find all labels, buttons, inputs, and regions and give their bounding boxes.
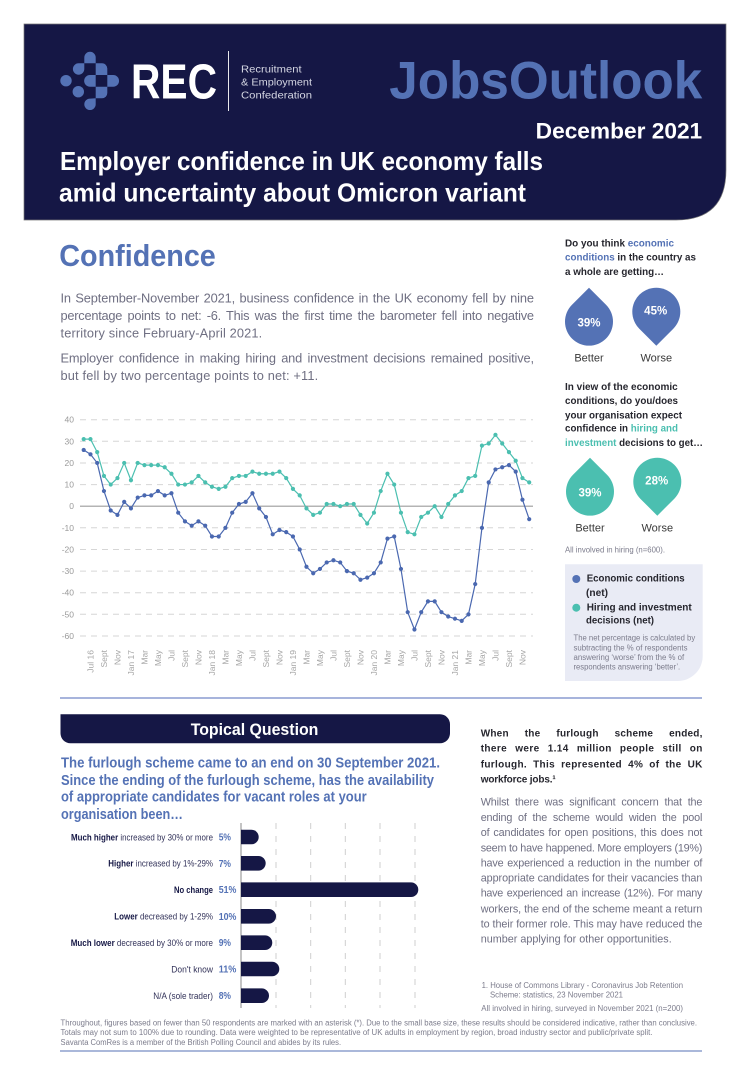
bar: much higher 5% bbox=[71, 830, 259, 844]
furlough body text: seem to have happened. More employers (19%) bbox=[481, 842, 702, 854]
legend note: respondents answering ‘better’. bbox=[574, 662, 680, 672]
furlough body text: have experienced an increase (12%). For many bbox=[481, 888, 703, 900]
furlough body text: of candidates for open positions, this does not bbox=[481, 827, 702, 839]
x axis labels: Nov bbox=[436, 649, 446, 665]
bar: much lower 9%: Much lower decreased by 30% or more bbox=[71, 938, 213, 949]
bar: no change 51% bbox=[174, 882, 418, 897]
bar: much lower 9%: 9% bbox=[219, 937, 232, 949]
sidebar base note: All involved in hiring (n=600). bbox=[565, 546, 665, 555]
x axis labels: Jul bbox=[409, 650, 419, 661]
x axis labels: Jan 21 bbox=[450, 650, 460, 676]
furlough lead text: When the furlough scheme ended, bbox=[481, 729, 703, 740]
x axis labels: Jul bbox=[328, 650, 338, 661]
drop: hiring worse 28%: 28% bbox=[645, 475, 668, 487]
furlough body text: number applying for other opportunities. bbox=[481, 934, 672, 946]
x axis labels: May bbox=[315, 649, 325, 666]
footnote and base: 1. House of Commons Library - Coronavirus Job Retention bbox=[482, 981, 683, 990]
bar: don't know 11%: 11% bbox=[219, 964, 237, 976]
legend note: subtracting the % of respondents bbox=[574, 644, 688, 652]
x axis labels: Jul bbox=[490, 650, 500, 661]
y axis labels: 20 bbox=[65, 458, 74, 468]
x axis labels: May bbox=[234, 649, 244, 666]
bar: n/a 8%: N/A (sole trader) bbox=[153, 991, 213, 1002]
bar: n/a 8%: 8% bbox=[219, 990, 232, 1002]
x axis labels: Nov bbox=[112, 649, 122, 665]
bar: higher 7% bbox=[108, 856, 266, 871]
logo wordmark: REC bbox=[131, 55, 217, 109]
sidebar question: hiring and investment: your organisation expect bbox=[565, 409, 682, 421]
confidence body text bbox=[60, 291, 534, 383]
logo divider bbox=[228, 51, 230, 111]
drop: economic worse 45%: 45% bbox=[644, 305, 667, 317]
bar: lower 10% bbox=[114, 909, 276, 924]
confidence body text: In September-November 2021, business confidence in the UK economy fell by nine bbox=[60, 291, 534, 306]
x axis labels: Sept bbox=[99, 649, 109, 668]
x axis labels: May bbox=[396, 649, 406, 666]
y axis labels: -20 bbox=[62, 544, 74, 554]
sidebar question: hiring and investment: conditions, do you/does bbox=[565, 395, 678, 407]
sidebar question: economic conditions: conditions in the country as bbox=[565, 252, 696, 264]
x axis labels: Jul bbox=[247, 650, 257, 661]
sidebar question: economic conditions: a whole are getting… bbox=[565, 266, 664, 278]
logo descriptor bbox=[241, 63, 312, 101]
topical question text: The furlough scheme came to an end on 30 September 2021. bbox=[61, 755, 440, 771]
bar: much lower 9% bbox=[71, 935, 272, 950]
legend note: answering ‘worse’ from the % of bbox=[574, 653, 685, 662]
confidence body text: Employer confidence in making hiring and investment decisions remained positive, bbox=[60, 351, 534, 366]
legend: economic conditions: Economic conditions bbox=[587, 573, 685, 585]
y axis labels: 0 bbox=[69, 501, 74, 511]
drop: economic worse 45% bbox=[632, 288, 680, 365]
y axis labels bbox=[62, 415, 74, 641]
x axis labels: Sept bbox=[261, 649, 271, 668]
bar: don't know 11%: Don't know bbox=[171, 964, 213, 975]
legend: hiring and investment: decisions (net) bbox=[586, 614, 654, 626]
y axis labels: -50 bbox=[62, 609, 74, 619]
furlough body text bbox=[480, 797, 703, 946]
section heading: Confidence: Confidence bbox=[59, 238, 216, 273]
logo descriptor: & Employment bbox=[241, 76, 312, 88]
x axis labels: Mar bbox=[301, 650, 311, 665]
furlough lead text: there were 1.14 million people still on bbox=[481, 744, 702, 755]
x axis labels: Sept bbox=[180, 649, 190, 668]
bar: don't know 11% bbox=[171, 962, 279, 976]
drop: hiring better 39% bbox=[566, 458, 614, 535]
bar chart: candidate availability bbox=[71, 823, 418, 1008]
logo descriptor: Confederation bbox=[241, 89, 312, 101]
x axis labels: Sept bbox=[342, 649, 352, 668]
furlough body text: Whilst there was significant concern that the bbox=[481, 797, 702, 809]
legend: hiring and investment: Hiring and investment bbox=[587, 602, 692, 614]
x axis labels: Nov bbox=[274, 649, 284, 665]
bar: higher 7%: Higher increased by 1%-29% bbox=[108, 859, 213, 870]
furlough lead text: workforce jobs.¹ bbox=[480, 775, 556, 786]
confidence body text: percentage points to net: -6. This was the first time the barometer fell into negative bbox=[60, 308, 534, 323]
drop: economic worse 45%: Worse bbox=[641, 353, 672, 365]
topical question text bbox=[61, 755, 440, 823]
y axis labels: -30 bbox=[62, 566, 74, 576]
x axis labels: Jan 17 bbox=[126, 650, 136, 676]
topical question banner: Topical Question bbox=[191, 720, 318, 739]
y axis labels: 10 bbox=[65, 480, 74, 490]
x axis labels: Mar bbox=[382, 650, 392, 665]
furlough body text: workers, the end of the scheme meant a return bbox=[480, 904, 702, 916]
topical question text: Since the ending of the furlough scheme, has the availability bbox=[61, 773, 434, 789]
topical question banner bbox=[60, 714, 450, 743]
methodology note: Savanta ComRes is a member of the British Polling Council and abides by its rules. bbox=[60, 1038, 341, 1047]
footnote and base: Scheme: statistics, 23 November 2021 bbox=[490, 991, 624, 1000]
drop: economic better 39%: 39% bbox=[577, 318, 601, 330]
furlough lead text: furlough. This represented 4% of the UK bbox=[481, 759, 703, 770]
topical question text: of appropriate candidates for vacant roles at your bbox=[61, 790, 367, 806]
headline: Employer confidence in UK economy falls bbox=[60, 146, 543, 176]
footnote and base: All involved in hiring, surveyed in November 2021 (n=200) bbox=[481, 1004, 683, 1013]
y axis labels: 30 bbox=[65, 436, 74, 446]
x axis labels: Nov bbox=[193, 649, 203, 665]
sidebar question: hiring and investment: confidence in hiring and bbox=[565, 423, 678, 435]
line chart: net confidence over time bbox=[62, 415, 533, 676]
legend panel bbox=[565, 564, 703, 681]
furlough lead text bbox=[480, 729, 703, 786]
x axis labels: Jul bbox=[166, 650, 176, 661]
x axis labels: Sept bbox=[504, 649, 514, 668]
drop: economic better 39% bbox=[565, 288, 613, 365]
series: economic conditions bbox=[84, 450, 529, 629]
x axis labels: Nov bbox=[355, 649, 365, 665]
footnote and base bbox=[481, 981, 683, 1013]
x axis labels: Mar bbox=[220, 650, 230, 665]
furlough body text: appropriate candidates for their vacancies than bbox=[481, 873, 702, 885]
methodology note: Totals may not sum to 100% due to rounding. Data were weighted to be representative of UK adults in employment by region, broad industry sector and public/private split. bbox=[60, 1028, 652, 1037]
publication name: JobsOutlook bbox=[389, 51, 703, 110]
publication date: December 2021 bbox=[536, 118, 702, 143]
x axis labels: Sept bbox=[423, 649, 433, 668]
bar: much higher 5%: 5% bbox=[219, 832, 232, 844]
bar: higher 7%: 7% bbox=[219, 858, 232, 870]
confidence body text: territory since February-April 2021. bbox=[60, 326, 262, 341]
furlough body text: to their former role. This may have reduced the bbox=[481, 919, 702, 931]
drop: hiring better 39%: 39% bbox=[578, 488, 602, 500]
logo descriptor: Recruitment bbox=[241, 63, 302, 75]
legend note: The net percentage is calculated by bbox=[574, 634, 695, 643]
drop: hiring better 39%: Better bbox=[575, 523, 605, 535]
x axis labels: Jan 18 bbox=[207, 650, 217, 676]
x axis labels: Nov bbox=[517, 649, 527, 665]
bar: no change 51%: 51% bbox=[219, 884, 237, 896]
bar: lower 10%: Lower decreased by 1-29% bbox=[114, 912, 213, 923]
bar: much higher 5%: Much higher increased by 30% or more bbox=[71, 832, 213, 843]
y axis labels: 40 bbox=[65, 415, 74, 425]
chart gridlines bbox=[80, 420, 533, 636]
methodology note: Throughout, figures based on fewer than 50 respondents are marked with an asterisk (*). Due to the small base size, these results should be considered indicative, rather than conclusive. bbox=[60, 1019, 697, 1028]
legend: hiring and investment bbox=[572, 602, 692, 626]
drop: hiring worse 28%: Worse bbox=[642, 523, 673, 535]
furlough body text: ending of the scheme would widen the pool bbox=[481, 812, 702, 824]
x axis labels: Jan 19 bbox=[288, 650, 298, 676]
x axis labels: Mar bbox=[139, 650, 149, 665]
drop: hiring worse 28% bbox=[633, 458, 681, 535]
confidence body text: but fell by two percentage points to net: +11. bbox=[60, 368, 318, 383]
legend: economic conditions: (net) bbox=[586, 587, 608, 599]
headline bbox=[59, 146, 543, 208]
drop: economic better 39%: Better bbox=[574, 353, 604, 365]
x axis labels: Jan 20 bbox=[369, 650, 379, 676]
sidebar question: hiring and investment: investment decisions to get… bbox=[565, 437, 703, 449]
sidebar question: hiring and investment: In view of the economic bbox=[565, 381, 678, 393]
y axis labels: -40 bbox=[62, 588, 74, 598]
y axis labels: -60 bbox=[62, 631, 74, 641]
sidebar question: hiring and investment bbox=[565, 381, 703, 449]
headline: amid uncertainty about Omicron variant bbox=[59, 178, 526, 208]
sidebar question: economic conditions bbox=[565, 238, 696, 278]
legend note bbox=[574, 634, 695, 672]
x axis labels: Mar bbox=[463, 650, 473, 665]
bar: lower 10%: 10% bbox=[219, 911, 237, 923]
series: hiring and investment decisions bbox=[84, 435, 529, 534]
y axis labels: -10 bbox=[62, 523, 74, 533]
methodology note bbox=[60, 1019, 697, 1047]
furlough body text: have experienced a reduction in the number of bbox=[481, 858, 703, 870]
sidebar question: economic conditions: Do you think economic bbox=[565, 238, 674, 250]
x axis labels: Jul 16 bbox=[85, 650, 95, 673]
header banner bbox=[24, 24, 726, 220]
x axis labels: May bbox=[477, 649, 487, 666]
icon: REC logo mark bbox=[60, 52, 119, 110]
bar: n/a 8% bbox=[153, 988, 269, 1003]
x axis labels bbox=[85, 649, 527, 676]
topical question text: organisation been… bbox=[61, 807, 183, 823]
x axis labels: May bbox=[153, 649, 163, 666]
bar: no change 51%: No change bbox=[174, 885, 213, 896]
legend: economic conditions bbox=[572, 573, 685, 599]
